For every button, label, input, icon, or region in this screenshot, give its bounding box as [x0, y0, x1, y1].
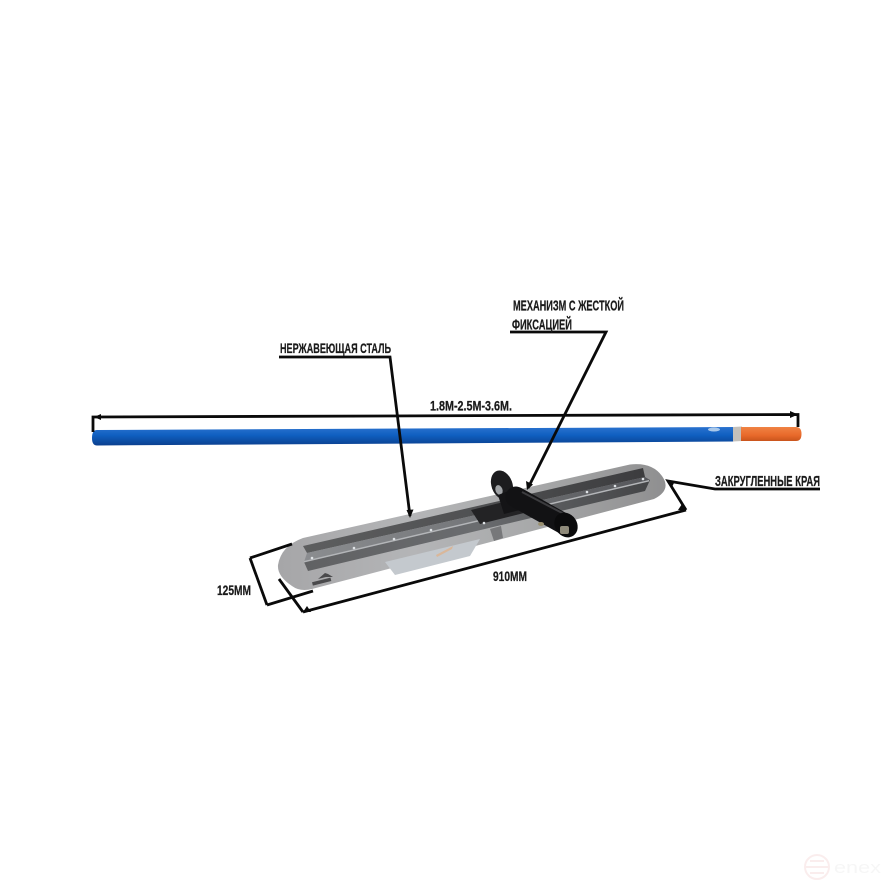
handle: cylinder	[516, 497, 566, 525]
watermark icon	[805, 855, 829, 879]
handle: wheel	[487, 467, 517, 503]
pole: blue tube	[92, 427, 734, 446]
leader: locking mechanism	[510, 332, 606, 488]
handle: neck	[498, 488, 520, 514]
handle: end cap reflection	[560, 526, 569, 534]
label: mechanism line 1: МЕХАНИЗМ С ЖЕСТКОЙ	[513, 297, 624, 315]
label: stainless steel: НЕРЖАВЕЮЩАЯ СТАЛЬ	[280, 340, 391, 356]
dimension: 910 mm	[303, 510, 686, 612]
dimension: 125 mm top extension	[250, 544, 292, 558]
trowel: rivets	[311, 478, 644, 559]
handle: cylinder end	[550, 508, 582, 542]
watermark text: enex	[834, 858, 882, 877]
dimension: 125 mm bottom extension	[267, 591, 313, 605]
trowel: bright centre reflection	[385, 539, 480, 575]
leader: stainless steel	[279, 357, 410, 516]
trowel	[278, 464, 666, 590]
arrowheads	[94, 411, 798, 612]
trowel: upper rail	[303, 468, 645, 553]
trowel: steel plate	[278, 464, 666, 590]
handle: cylinder sheen	[522, 492, 566, 515]
swivel handle mount	[487, 467, 582, 542]
label: rounded edges: ЗАКРУГЛЕННЫЕ КРАЯ	[715, 474, 820, 490]
leader: rounded edges	[668, 481, 820, 510]
dimension and leader lines	[93, 332, 820, 612]
label: length 910 mm: 910ММ	[493, 568, 527, 584]
pole: logo mark	[708, 428, 720, 432]
trowel: mount bracket	[471, 498, 528, 524]
trowel: lower rail	[304, 480, 650, 571]
trowel: shadow under mount	[490, 526, 503, 541]
watermark: enex	[805, 855, 882, 879]
handle: bolt	[538, 522, 544, 526]
dimension: 125 mm bracket	[250, 558, 267, 605]
dimension: 910 mm end tick	[279, 579, 303, 612]
pole: orange grip	[741, 427, 802, 441]
trowel: rail middle strip	[304, 477, 650, 562]
trowel: brand logo	[312, 573, 333, 586]
telescopic pole	[92, 426, 802, 446]
trowel: lower rail highlight	[304, 480, 649, 562]
label: mechanism line 2: ФИКСАЦИЕЙ	[512, 316, 572, 334]
pole: metal collar	[733, 426, 742, 442]
label: pole length: 1.8М-2.5М-3.6М.	[430, 398, 512, 414]
dimension: pole length	[93, 414, 798, 432]
handle: wheel hub	[494, 484, 504, 496]
trowel: orange glare	[436, 546, 453, 557]
label: width 125 mm: 125ММ	[217, 582, 251, 598]
